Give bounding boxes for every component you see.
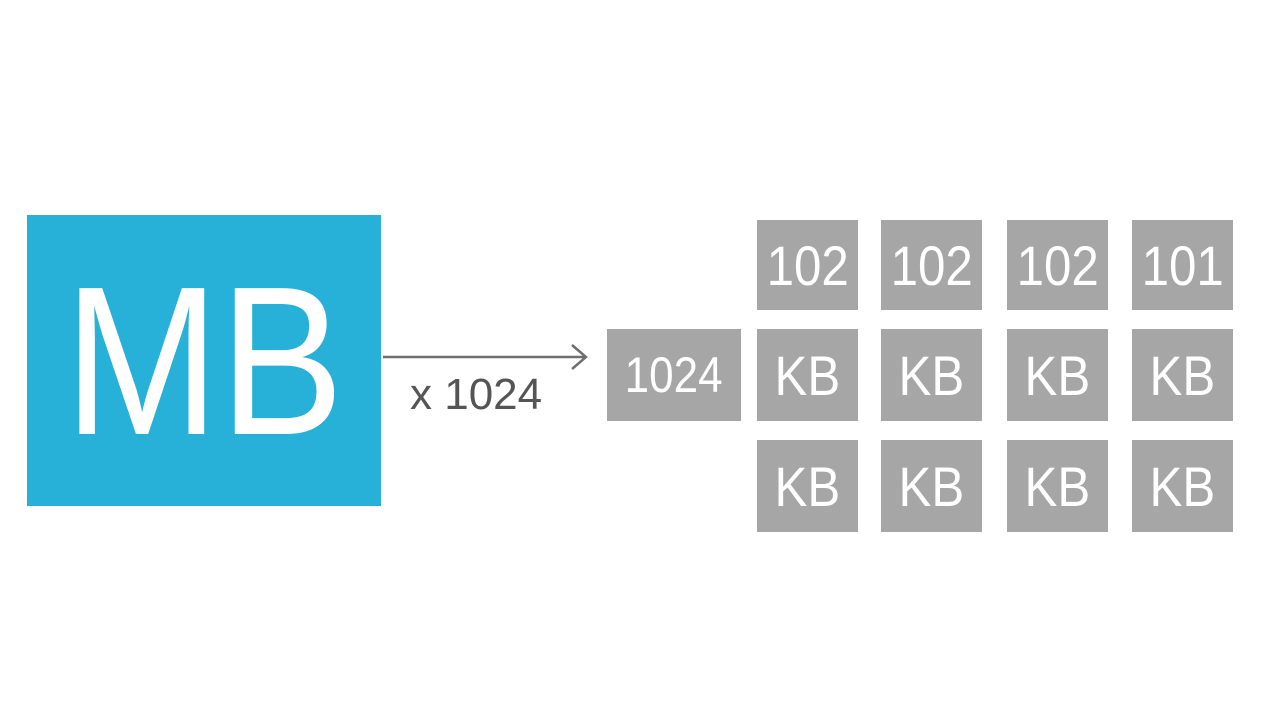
- grid of KB boxes: KB: [1025, 344, 1090, 406]
- arrow: [383, 344, 588, 370]
- box: 1024: [607, 329, 741, 421]
- grid of KB boxes: 102: [766, 234, 849, 296]
- grid of KB boxes: KB: [899, 344, 964, 406]
- grid of KB boxes: 102: [890, 234, 973, 296]
- grid of KB boxes: 102: [1016, 234, 1099, 296]
- MB box: MB: [64, 242, 344, 478]
- grid of KB boxes: KB: [775, 454, 840, 518]
- grid of KB boxes: KB: [899, 454, 964, 518]
- MB box: [27, 215, 381, 506]
- multiplier label: x 1024: [410, 370, 542, 419]
- grid of KB boxes: [757, 220, 1233, 532]
- grid of KB boxes: KB: [1150, 454, 1215, 518]
- grid of KB boxes: KB: [1025, 454, 1090, 518]
- grid of KB boxes: KB: [775, 344, 840, 406]
- grid of KB boxes: KB: [1150, 344, 1215, 406]
- grid of KB boxes: 101: [1141, 234, 1224, 296]
- box: 1024: 1024: [625, 347, 723, 403]
